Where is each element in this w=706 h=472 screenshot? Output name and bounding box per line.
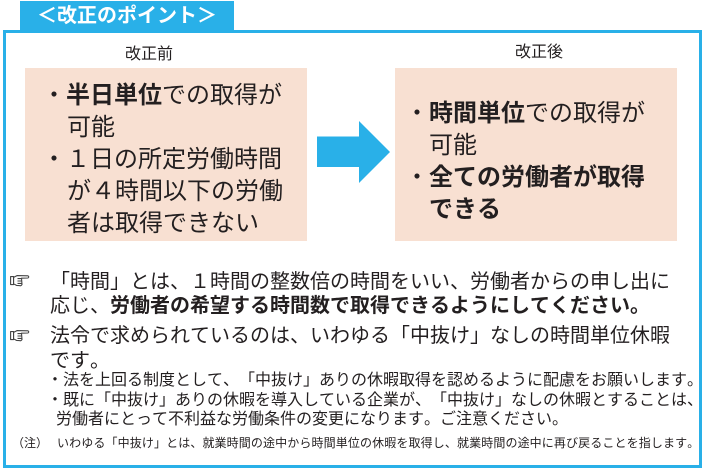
title tab bbox=[20, 1, 234, 30]
sub-note 2 line 2: 労働者にとって不利益な労働条件の変更になります。ご注意ください。 bbox=[56, 411, 568, 428]
text: possible: 可能 bbox=[429, 132, 477, 159]
heading: after revision: 改正後 bbox=[515, 44, 563, 61]
arrow bbox=[317, 121, 390, 183]
sub-note 1: ・法を上回る制度として、「中抜け」ありの休暇取得を認めるように配慮をお願いします。 bbox=[47, 372, 703, 389]
text: possible: 可能 bbox=[67, 114, 115, 141]
note 2 line 2: です。 bbox=[50, 350, 110, 372]
icon: pointing hand 1 bbox=[10, 275, 30, 286]
note 2 line 1: 法令で求められているのは、いわゆる「中抜け」なしの時間単位休暇 bbox=[50, 325, 670, 347]
note 1 line 2: 応じ、労働者の希望する時間数で取得できるようにしてください。 bbox=[50, 295, 650, 317]
text: cannot take: 者は取得できない bbox=[67, 210, 259, 237]
note 1 line 1: 「時間」とは、１時間の整数倍の時間をいい、労働者からの申し出に bbox=[50, 271, 670, 293]
title tab: ＜改正のポイント＞ bbox=[37, 5, 217, 27]
footnote text: いわゆる「中抜け」とは、就業時間の途中から時間単位の休暇を取得し、就業時間の途中に再び戻ることを指します。 bbox=[57, 436, 699, 450]
icon: pointing hand 2 bbox=[10, 330, 30, 342]
text: can take: できる bbox=[429, 196, 501, 223]
panel: before revision bbox=[25, 68, 307, 241]
footnote label: （注） bbox=[12, 436, 48, 450]
bullet: half-day unit: ・半日単位での取得が bbox=[42, 82, 282, 109]
text: four hours or less: が４時間以下の労働 bbox=[67, 178, 283, 205]
heading: before revision: 改正前 bbox=[125, 46, 173, 63]
panel: after revision bbox=[395, 68, 677, 241]
bullet: one day working hours: ・１日の所定労働時間 bbox=[42, 146, 282, 173]
bullet: all workers: ・全ての労働者が取得 bbox=[405, 164, 645, 191]
sub-note 2 line 1: ・既に「中抜け」ありの休暇を導入している企業が、「中抜け」なしの休暇とすることは、 bbox=[47, 392, 703, 409]
bullet: hourly unit: ・時間単位での取得が bbox=[405, 100, 645, 127]
